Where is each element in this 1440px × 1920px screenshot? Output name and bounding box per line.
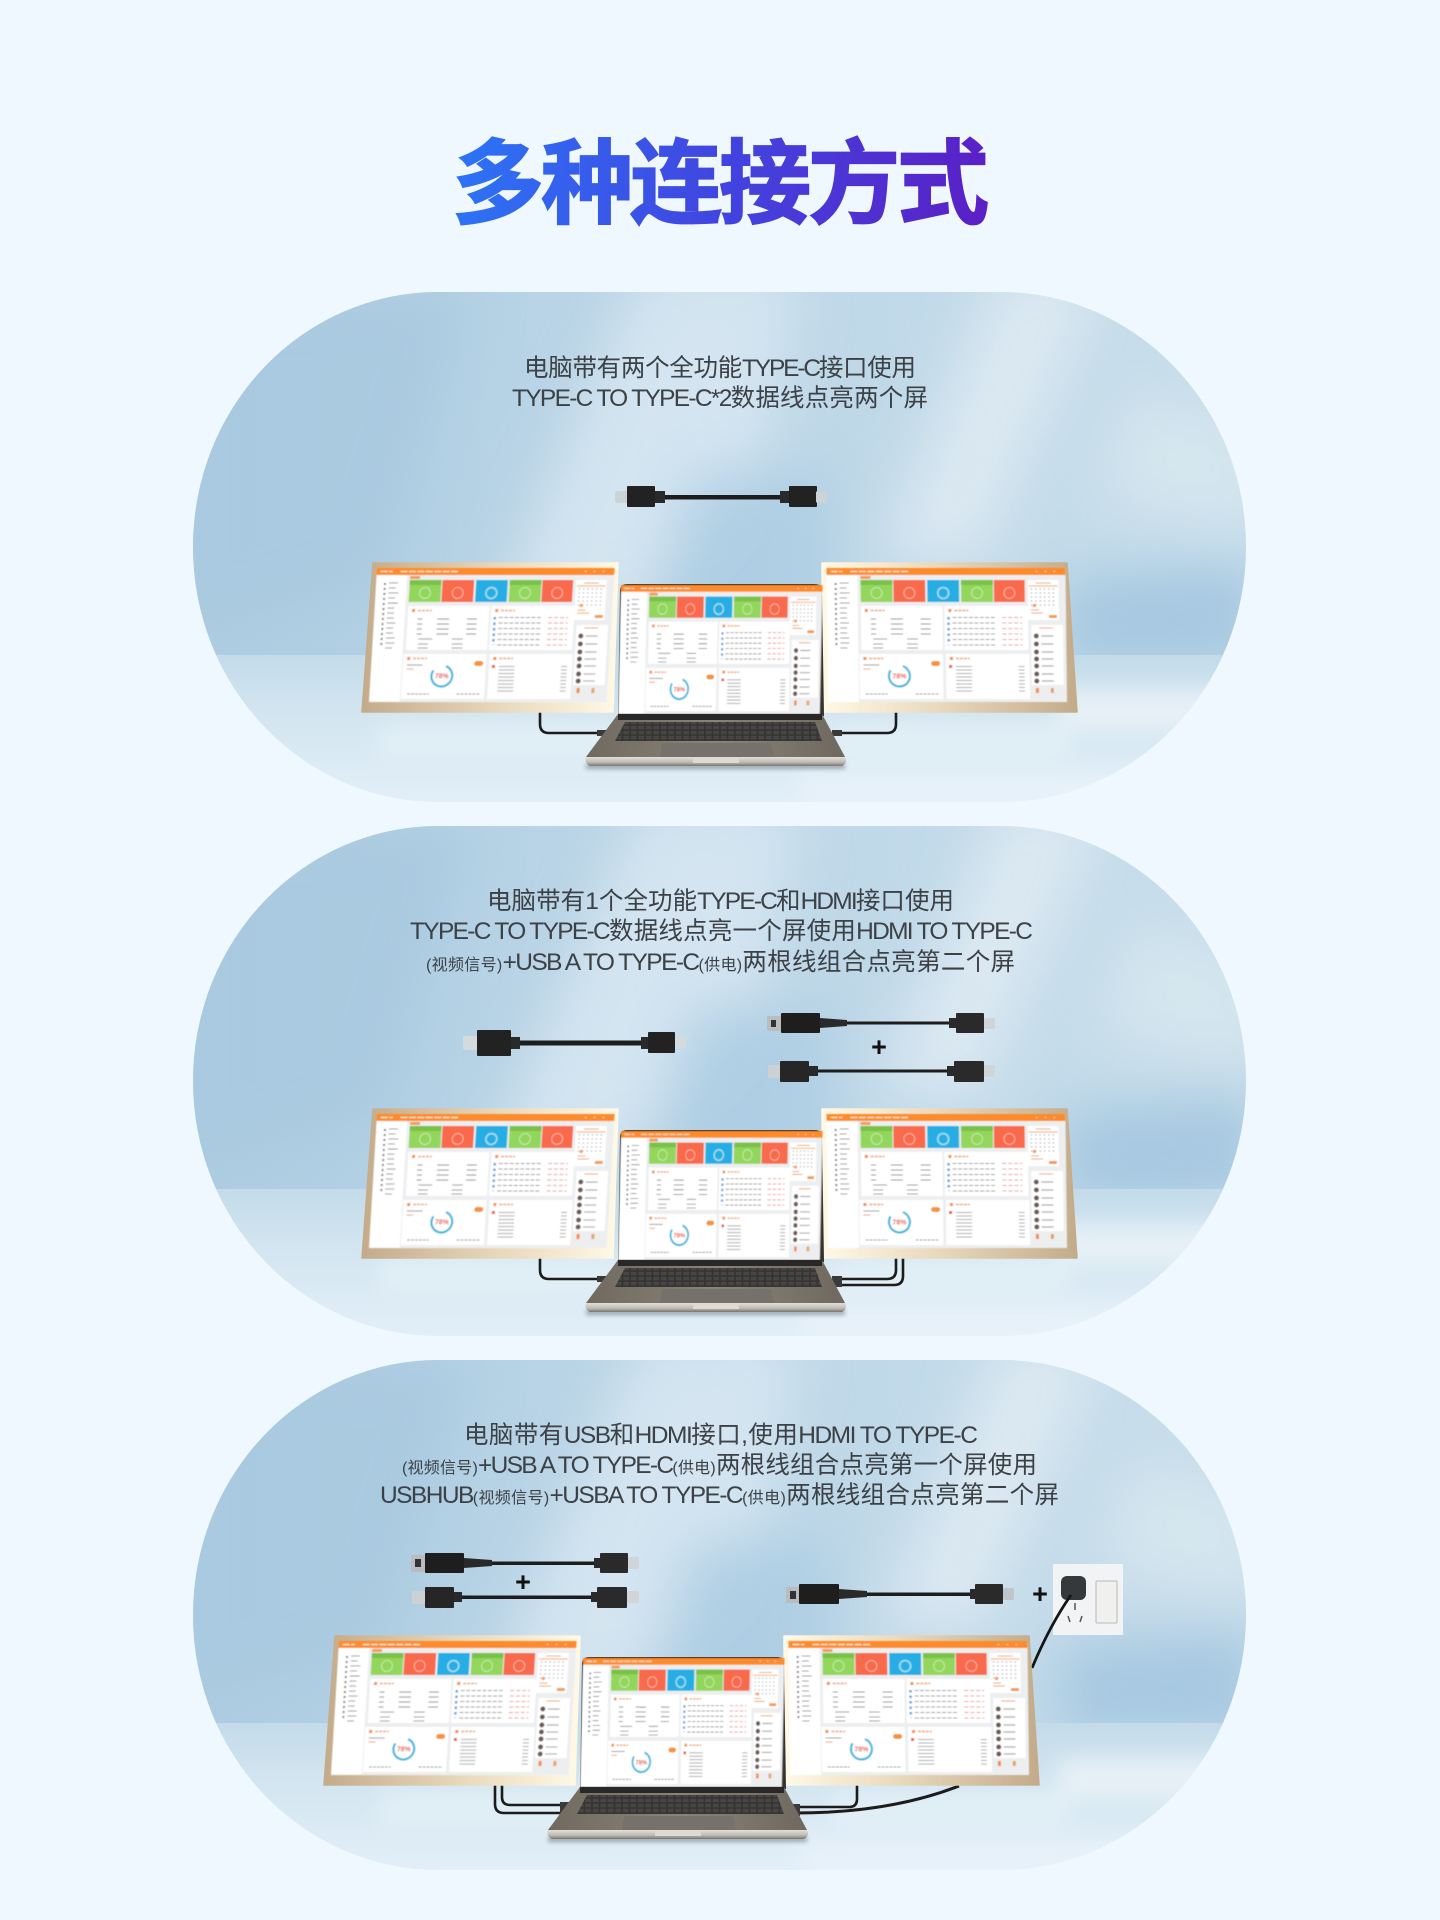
panel: two full-function TYPE-C ports bbox=[170, 270, 1260, 804]
panel caption bbox=[380, 1421, 1059, 1509]
monitors and laptop bbox=[362, 1109, 1077, 1315]
icon: plus sign: + bbox=[515, 1567, 531, 1597]
icon: USB A to TYPE-C cable bbox=[412, 1587, 639, 1608]
icon: USB A to TYPE-C cable bbox=[768, 1061, 995, 1082]
panel caption: 电脑带有两个全功能TYPE-C接口使用 bbox=[524, 354, 916, 382]
icon: TYPE-C cable bbox=[615, 486, 827, 507]
panel caption: USBHUB(视频信号)+USBA TO TYPE-C(供电)两根线组合点亮第二个屏 bbox=[380, 1481, 1059, 1509]
panel: TYPE-C and HDMI ports bbox=[170, 804, 1260, 1338]
monitors and laptop bbox=[362, 563, 1077, 769]
icon: TYPE-C cable bbox=[463, 1030, 686, 1056]
panel caption: (视频信号)+USB A TO TYPE-C(供电)两根线组合点亮第二个屏 bbox=[426, 948, 1015, 976]
panel caption: TYPE-C TO TYPE-C*2数据线点亮两个屏 bbox=[512, 384, 928, 412]
icon: plus sign: + bbox=[1032, 1579, 1048, 1609]
icon: HDMI to TYPE-C cable bbox=[411, 1553, 639, 1573]
connection cables bbox=[495, 1785, 959, 1816]
icon: HDMI to TYPE-C cable bbox=[767, 1013, 995, 1033]
connection cables bbox=[540, 712, 896, 736]
connection cables bbox=[540, 1258, 903, 1287]
icon: plus sign: + bbox=[871, 1032, 887, 1062]
panel caption: (视频信号)+USB A TO TYPE-C(供电)两根线组合点亮第一个屏使用 bbox=[402, 1451, 1037, 1479]
panel caption bbox=[512, 354, 928, 412]
panel caption: 电脑带有1个全功能TYPE-C和HDMI接口使用 bbox=[487, 887, 954, 915]
icon: wall socket with plug bbox=[1032, 1564, 1123, 1668]
panel caption: 电脑带有USB和HDMI接口,使用HDMI TO TYPE-C bbox=[464, 1421, 977, 1449]
panel: USB and HDMI ports bbox=[170, 1338, 1260, 1872]
title: 多种连接方式 bbox=[452, 134, 989, 236]
panel caption: TYPE-C TO TYPE-C数据线点亮一个屏使用HDMI TO TYPE-C bbox=[410, 917, 1032, 945]
panel background bbox=[170, 1338, 1260, 1872]
panel caption bbox=[410, 887, 1032, 976]
monitors and laptop bbox=[324, 1636, 1039, 1842]
panel background bbox=[170, 804, 1260, 1338]
panel background bbox=[170, 270, 1260, 804]
icon: USB hub cable bbox=[786, 1584, 1014, 1604]
